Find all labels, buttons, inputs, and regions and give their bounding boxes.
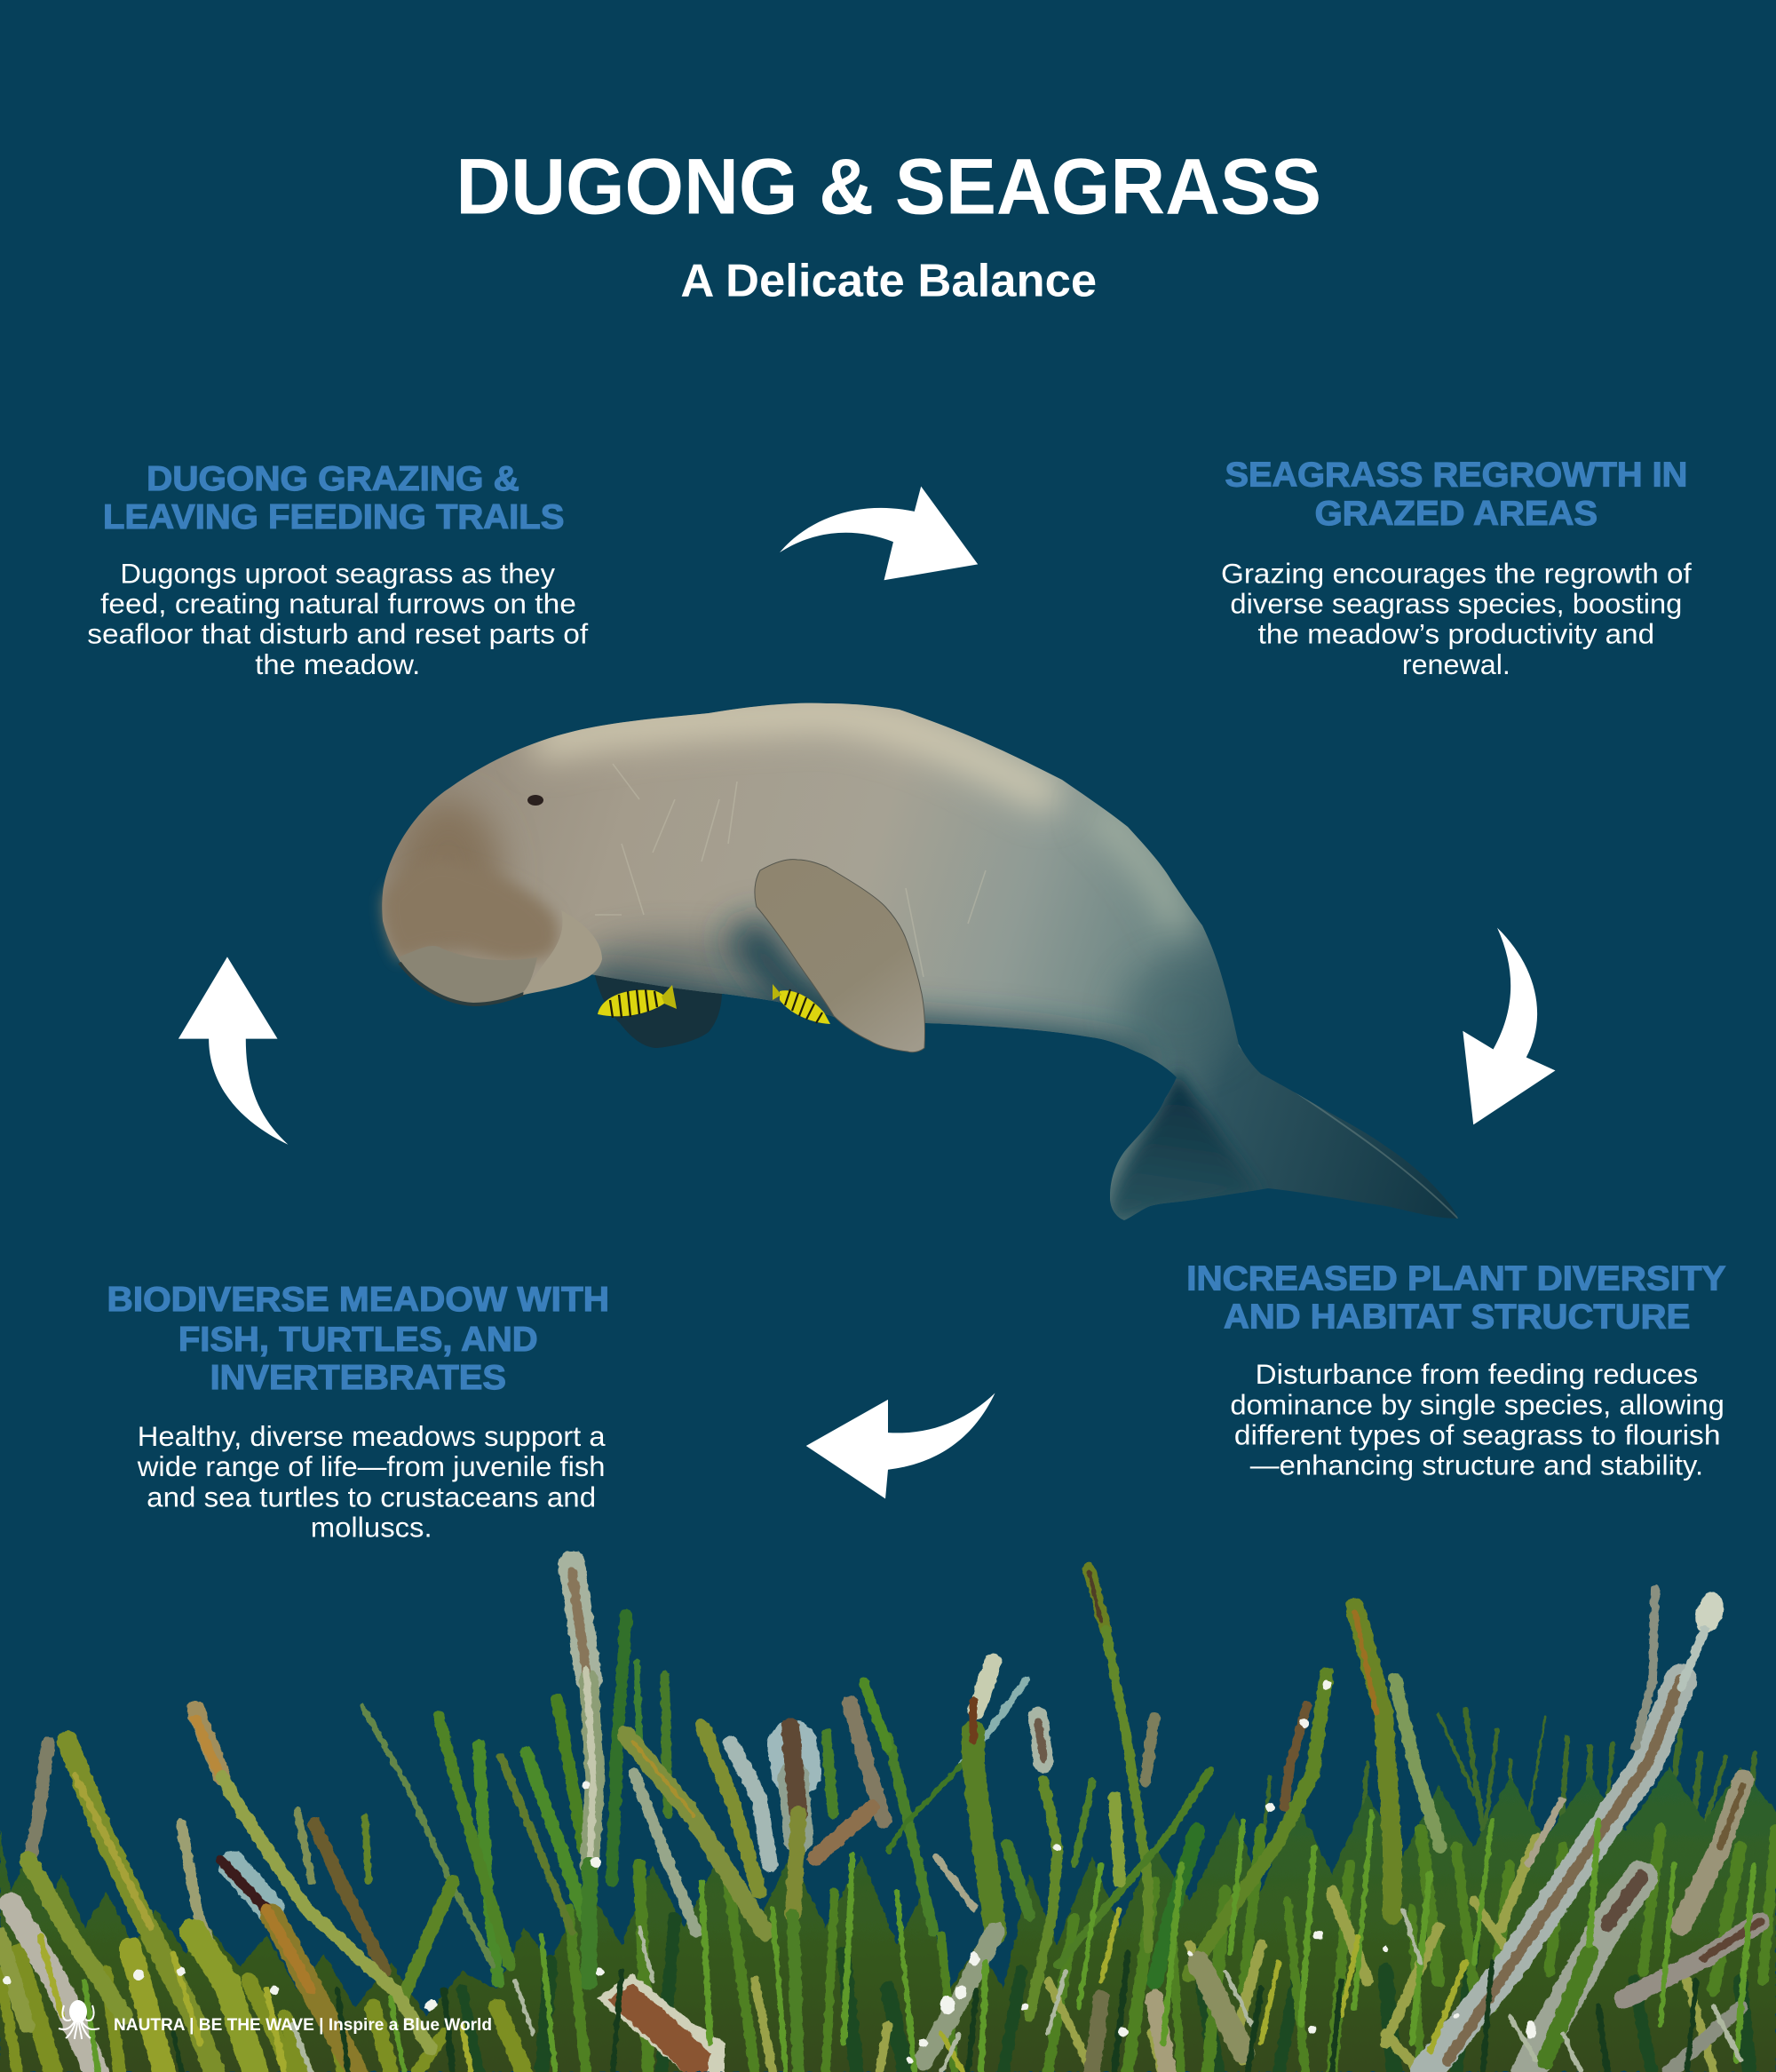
far flipper [594, 972, 722, 1048]
text: increased plant diversity: —enhancing structure and stability. [1250, 1450, 1703, 1481]
heading: increased plant diversity: AND HABITAT STRUCTURE [1224, 1298, 1690, 1337]
text: seagrass regrowth: the meadow’s productivity and [1258, 619, 1654, 650]
filler blades: left lower [0, 1954, 524, 2072]
text: biodiverse meadow [137, 1421, 606, 1544]
specks [3, 1680, 1536, 2064]
fine blades: yellow olive [40, 1909, 1465, 2072]
background thin blades [1261, 1710, 1755, 1865]
subtitle: A Delicate Balance [680, 255, 1097, 306]
center-right blades [888, 1568, 1440, 2072]
panel: biodiverse meadow [107, 1281, 609, 1544]
filler blades: olive and pale [755, 1838, 1714, 2072]
left large blades [0, 1564, 888, 2072]
seagrass meadow [0, 1564, 1776, 2072]
body shading [395, 712, 1458, 1221]
heading: biodiverse meadow [107, 1281, 609, 1397]
heading: seagrass regrowth [1225, 456, 1687, 533]
fish 1 [598, 985, 677, 1018]
lip [523, 910, 602, 995]
text: increased plant diversity [1230, 1359, 1724, 1481]
eye [527, 795, 543, 806]
heading: biodiverse meadow: FISH, TURTLES, AND [178, 1321, 538, 1359]
body [382, 703, 1458, 1220]
footer brand text: NAUTRA | BE THE WAVE | Inspire a Blue World [114, 2016, 492, 2035]
text: biodiverse meadow: molluscs. [311, 1512, 432, 1544]
text: dugong grazing: the meadow. [255, 649, 420, 680]
text: increased plant diversity: Disturbance from feeding reduces [1256, 1359, 1698, 1390]
heading: biodiverse meadow: INVERTEBRATES [210, 1359, 506, 1397]
text: dugong grazing: seafloor that disturb and reset parts of [87, 619, 589, 650]
text: seagrass regrowth: diverse seagrass species, boosting [1230, 588, 1682, 619]
meadow mass [0, 1767, 1776, 2072]
scars [595, 764, 986, 977]
panel: increased plant diversity [1186, 1259, 1726, 1481]
arrow: top, pointing right [780, 487, 978, 580]
text: increased plant diversity: different types of seagrass to flourish [1234, 1419, 1721, 1450]
arrow: bottom, pointing left [806, 1393, 995, 1499]
heading: seagrass regrowth: SEAGRASS REGROWTH IN [1225, 456, 1687, 495]
heading: seagrass regrowth: GRAZED AREAS [1315, 495, 1598, 533]
fine blades: pale encrusted [293, 1909, 1740, 2072]
text: dugong grazing [87, 558, 589, 680]
heading: dugong grazing [103, 460, 564, 536]
fine blades: bright green [84, 1812, 1754, 2072]
text: biodiverse meadow: Healthy, diverse meadows support a [138, 1421, 606, 1452]
text: seagrass regrowth [1221, 558, 1692, 680]
logo: octopus [59, 2000, 99, 2039]
heading: dugong grazing: DUGONG GRAZING & [147, 460, 519, 498]
right large blades [1426, 1589, 1760, 2072]
heading: increased plant diversity: INCREASED PLANT DIVERSITY [1186, 1259, 1726, 1298]
panel: dugong grazing [87, 460, 589, 680]
filler blades: mid green [568, 1830, 1776, 2072]
near flipper [755, 860, 925, 1052]
text: biodiverse meadow: wide range of life—from juvenile fish [137, 1451, 606, 1482]
text: biodiverse meadow: and sea turtles to crustaceans and [147, 1481, 596, 1512]
muzzle disc [384, 860, 559, 961]
fish 2 [773, 984, 830, 1024]
heading: biodiverse meadow: BIODIVERSE MEADOW WITH [107, 1281, 609, 1319]
text: dugong grazing: Dugongs uproot seagrass as they [120, 558, 555, 589]
text: seagrass regrowth: Grazing encourages the regrowth of [1221, 558, 1692, 589]
filler blades: dark lower [462, 1918, 1749, 2072]
text: seagrass regrowth: renewal. [1402, 649, 1510, 680]
chin [398, 946, 537, 1004]
fine blades: dark [173, 1954, 1696, 2072]
dugong illustration [382, 703, 1458, 1221]
panel: seagrass regrowth [1221, 456, 1692, 680]
arrow: left, pointing up [178, 957, 288, 1145]
title: DUGONG & SEAGRASS [456, 141, 1321, 230]
text: dugong grazing: feed, creating natural furrows on the [100, 588, 576, 619]
heading: dugong grazing: LEAVING FEEDING TRAILS [103, 498, 564, 536]
text: increased plant diversity: dominance by single species, allowing [1230, 1389, 1724, 1420]
arrow: right, pointing down [1463, 928, 1555, 1124]
heading: increased plant diversity [1186, 1259, 1726, 1337]
chin shadow [400, 963, 524, 1004]
